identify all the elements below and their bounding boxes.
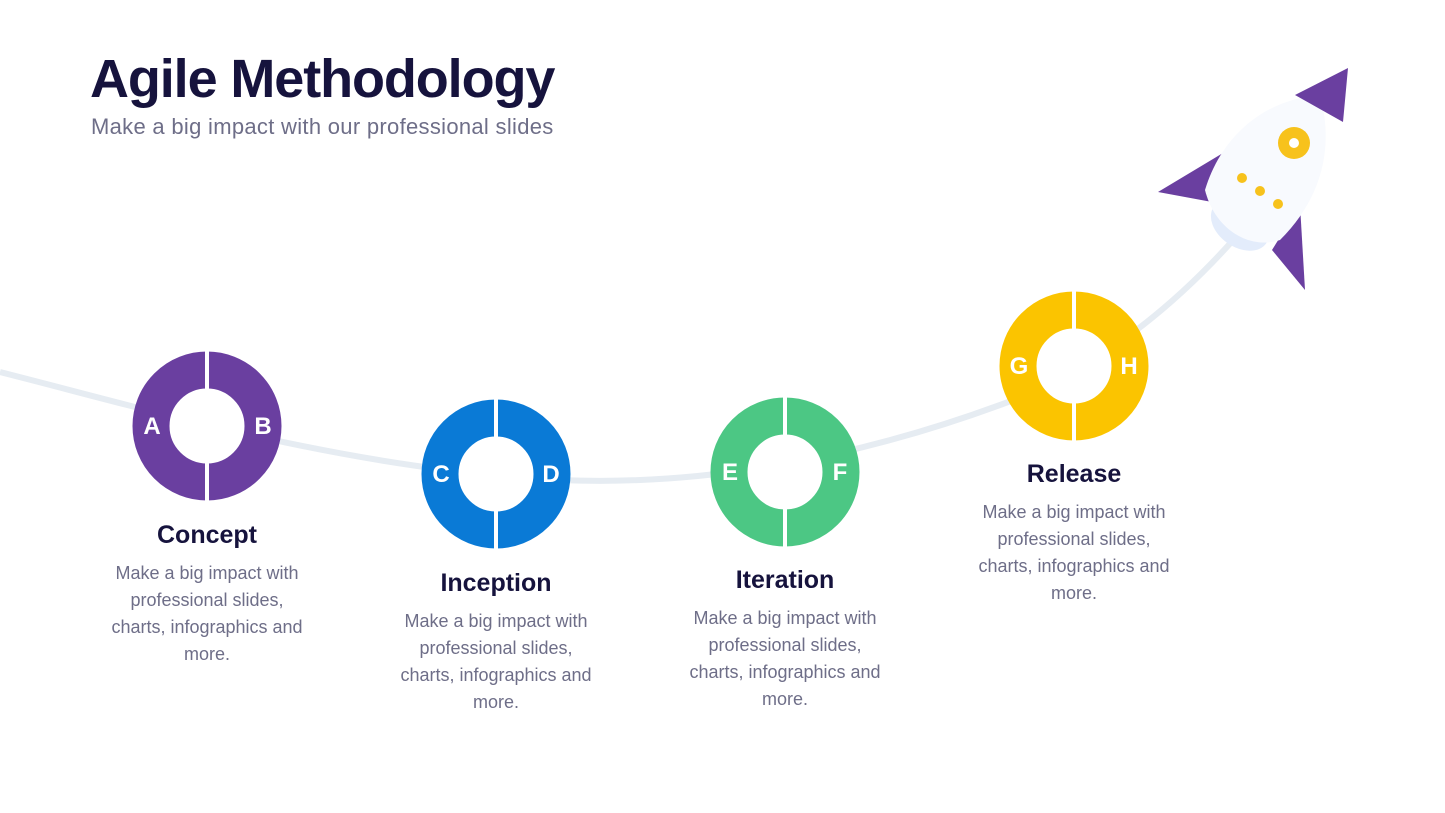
donut C/D: D (542, 461, 560, 488)
donut A/B (143, 350, 272, 502)
rocket (1158, 68, 1348, 290)
step: Concept: professional slides, (130, 590, 284, 610)
step: Concept: Concept (157, 521, 257, 549)
donut A/B: B (254, 413, 272, 440)
step: Concept: more. (184, 644, 230, 664)
step: Iteration: more. (762, 689, 808, 709)
donut G/H: G (1010, 353, 1028, 380)
step: Release (978, 460, 1170, 603)
step: Iteration: charts, infographics and (689, 662, 881, 682)
step: Concept (111, 521, 303, 664)
step: Concept: Make a big impact with (115, 563, 299, 583)
step: Inception (400, 569, 592, 712)
step: Inception: Inception (440, 569, 552, 597)
donut C/D: C (432, 461, 450, 488)
step: Inception: charts, infographics and (400, 665, 592, 685)
step: Iteration (689, 566, 881, 709)
step: Iteration: Make a big impact with (693, 608, 877, 628)
step: Inception: more. (473, 692, 519, 712)
step: Release: charts, infographics and (978, 556, 1170, 576)
donut E/F: F (833, 459, 847, 486)
donut C/D (432, 398, 560, 550)
donut G/H (1010, 290, 1138, 442)
step: Release: Make a big impact with (982, 502, 1166, 522)
step: Inception: professional slides, (419, 638, 573, 658)
path curve (0, 238, 1235, 481)
step: Release: more. (1051, 583, 1097, 603)
step: Concept: charts, infographics and (111, 617, 303, 637)
donut A/B: A (143, 413, 161, 440)
donut E/F: E (722, 459, 738, 486)
step: Inception: Make a big impact with (404, 611, 588, 631)
subtitle: Make a big impact with our professional slides (91, 114, 554, 139)
step: Iteration: professional slides, (708, 635, 862, 655)
step: Release: professional slides, (997, 529, 1151, 549)
title: Agile Methodology (90, 49, 554, 109)
donut G/H: H (1120, 353, 1138, 380)
step: Release: Release (1027, 460, 1121, 488)
step: Iteration: Iteration (736, 566, 834, 594)
donut E/F (722, 396, 847, 548)
